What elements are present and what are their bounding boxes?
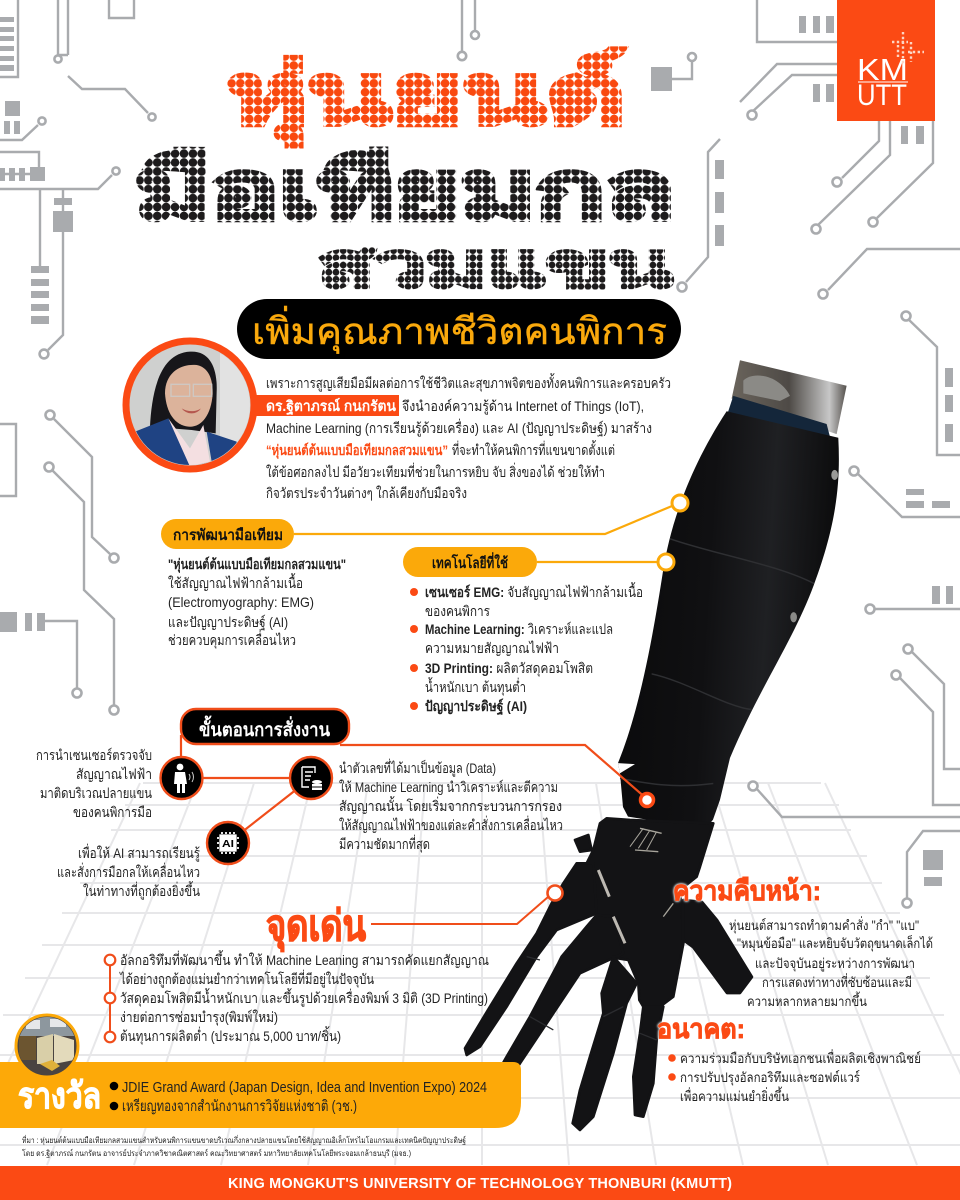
heading pill: operating steps: ขั้นตอนการสั่งงาน [199,715,330,741]
text: step data [339,759,563,853]
award heading: รางวัล [18,1075,101,1116]
list: highlights: ได้อย่างถูกต้องแม่นยำกว่าเทคโนโลยีที่มีอยู่ในปัจจุบัน [119,970,374,988]
title line 3: สวมแขน: สวมแขน [318,232,672,299]
intro paragraph: จึงนำองค์ความรู้ด้าน Internet of Things (IoT), [402,398,644,415]
circuit lines left top [0,0,156,358]
logo: KMUTT: KM [857,52,908,87]
author name highlight: ดร.ฐิตาภรณ์ กนกรัตน [266,397,396,416]
text: step AI: เพื่อให้ AI สามารถเรียนรู้ [78,844,200,862]
text: progress: ความหลากหลายมากขึ้น [747,991,867,1009]
subtitle pill: เพิ่มคุณภาพชีวิตคนพิการ [252,305,667,354]
callout: technology used: เทคโนโลยีที่ใช้ [432,552,508,572]
source note: โดย ดร.ฐิตาภรณ์ กนกรัตน อาจารย์ประจำภาควิชาคณิตศาสตร์ คณะวิทยาศาสตร์ มหาวิทยาลัยเทคโนโลยีพระจอมเกล้าธนบุรี (มจธ.) [22,1148,411,1158]
list: future: ความร่วมมือกับบริษัทเอกชนเพื่อผลิตเชิงพาณิชย์ [680,1049,921,1066]
list: highlights: วัสดุคอมโพสิตมีน้ำหนักเบา และขึ้นรูปด้วยเครื่องพิมพ์ 3 มิติ (3D Printing) [120,988,488,1007]
callout: prosthetic development [161,495,688,549]
title line 1: หุ่นยนต์: หุ่นยนต์ [227,48,625,146]
text: step sensor: การนำเซนเซอร์ตรวจจับ [36,747,152,763]
circuit lines top right [458,0,960,455]
intro paragraph: ใต้ข้อศอกลงไป มีอวัยวะเทียมที่ช่วยในการหยิบ จับ สิ่งของได้ ช่วยให้ทำ [266,463,605,480]
list: technology used [410,582,643,716]
text: step data: มีความชัดมากที่สุด [339,835,430,853]
list: highlights: ง่ายต่อการซ่อมบำรุง(พิมพ์ใหม่) [120,1009,278,1026]
award photo [16,1015,78,1077]
list: technology used: ปัญญาประดิษฐ์ (AI) [425,698,527,716]
subtitle pill [237,299,681,359]
text: step data: ให้สัญญาณไฟฟ้าของแต่ละคำสั่งการเคลื่อนไหว [339,816,563,833]
list: highlights [105,950,489,1045]
intro paragraph: “หุ่นยนต์ต้นแบบมือเทียมกลสวมแขน” [266,442,448,459]
list: technology used: น้ำหนักเบา ต้นทุนต่ำ [425,677,526,696]
text: progress [729,916,933,1009]
text: step sensor: ของคนพิการมือ [73,804,152,820]
footer bar: KING MONGKUT'S UNIVERSITY OF TECHNOLOGY THONBURI (KMUTT) [228,1176,732,1192]
text: prosthetic development: (Electromyography: EMG) [168,594,314,610]
list: future [668,1049,921,1104]
text: progress: การแสดงท่าทางที่ซับซ้อนและมี [762,973,912,990]
logo: KMUTT [837,0,935,121]
text: step AI: และสั่งการมือกลให้เคลื่อนไหว [57,863,200,880]
heading: future: อนาคต: [657,1014,745,1044]
title line 2: มือเทียมกล: มือเทียมกล [135,146,675,235]
heading pill: operating steps [181,709,349,744]
award band: JDIE Grand Award (Japan Design, Idea and Invention Expo) 2024 [122,1079,487,1096]
text: step sensor [36,747,152,820]
list: technology used: ของคนพิการ [425,603,490,619]
list: technology used: 3D Printing: ผลิตวัสดุคอมโพสิต [425,660,593,677]
award band: เหรียญทองจากสำนักงานการวิจัยแห่งชาติ (วช.) [122,1098,357,1115]
robotic arm photo [465,360,847,1130]
text: step data: สัญญาณนั้น โดยเริ่มจากกระบวนการกรอง [339,796,562,814]
text: step sensor: มาติดบริเวณปลายแขน [40,785,152,801]
circuit lines left middle [0,410,118,714]
heading: highlights [266,886,562,952]
text: progress: หุ่นยนต์สามารถทำตามคำสั่ง "กำ" "แบ" [729,916,919,934]
list: future: เพื่อความแม่นยำยิ่งขึ้น [680,1086,789,1104]
text: step sensor: สัญญาณไฟฟ้า [76,766,152,782]
text: prosthetic development: ช่วยควบคุมการเคลื่อนไหว [168,631,296,649]
text: step AI: ในท่าทางที่ถูกต้องยิ่งขึ้น [83,881,200,900]
list: future: การปรับปรุงอัลกอริทึมและซอฟต์แวร์ [680,1069,860,1086]
text: prosthetic development: ใช้สัญญาณไฟฟ้ากล้ามเนื้อ [168,573,303,591]
icon: AI chip [207,822,249,864]
list: highlights: อัลกอริทึมที่พัฒนาขึ้น ทำให้ Machine Leaning สามารถคัดแยกสัญญาณ [120,950,489,968]
text: step data: นำตัวเลขที่ได้มาเป็นข้อมูล (Data) [339,759,496,777]
text: step data: ให้ Machine Learning นำวิเคราะห์และตีความ [339,779,558,795]
callout: prosthetic development: การพัฒนามือเทียม [173,527,283,544]
text: progress: และปัจจุบันอยู่ระหว่างการพัฒนา [755,956,915,972]
icon: person with sensor [160,757,202,799]
intro paragraph: ที่จะทำให้คนพิการที่แขนขาดตั้งแต่ [452,440,615,458]
list: technology used: เซนเซอร์ EMG: จับสัญญาณไฟฟ้ากล้ามเนื้อ [425,582,643,600]
icon: data document [290,757,332,799]
logo: KMUTT: UTT [857,79,907,112]
hand [465,818,752,1130]
text: prosthetic development [168,556,346,649]
intro paragraph: เพราะการสูญเสียมือมีผลต่อการใช้ชีวิตและสุขภาพจิตของทั้งคนพิการและครอบครัว [266,373,671,392]
forearm socket [618,360,847,827]
source note [22,1134,466,1158]
callout: technology used [403,547,674,577]
list: technology used: ความหมายสัญญาณไฟฟ้า [425,640,559,656]
icon: AI chip: AI [222,839,234,850]
perspective grid background [0,783,960,1165]
text: prosthetic development: และปัญญาประดิษฐ์ (AI) [168,614,288,631]
footer bar [0,1166,960,1200]
intro paragraph: Machine Learning (การเรียนรู้ด้วยเครื่อง) และ AI (ปัญญาประดิษฐ์) มาสร้าง [266,419,652,437]
arm marker: wrist [640,794,654,806]
author name highlight [255,395,399,416]
text: prosthetic development: "หุ่นยนต์ต้นแบบมือเทียมกลสวมแขน" [168,556,346,573]
heading: progress: ความคืบหน้า: [673,876,821,906]
intro paragraph [255,373,671,501]
portrait photo [126,341,254,477]
intro paragraph: กิจวัตรประจำวันต่างๆ ใกล้เคียงกับมือจริง [266,485,467,501]
award band [0,1062,521,1128]
text: step AI [57,844,200,900]
source note: ที่มา : หุ่นยนต์ต้นแบบมือเทียมกลสวมแขนสำหรับคนพิการแขนขาดบริเวณกึ่งกลางปลายแขนโดยใช้สัญญาณอิเล็กโทรไมโอแกรมและเทคนิคปัญญาประดิษฐ์ [22,1134,466,1145]
circuit lines right middle [748,466,960,908]
operating steps connector lines [181,735,647,843]
list: technology used: Machine Learning: วิเคราะห์และแปล [425,621,613,637]
list: highlights: ต้นทุนการผลิตต่ำ (ประมาณ 5,000 บาท/ชิ้น) [120,1026,341,1045]
heading: highlights: จุดเด่น [266,902,366,952]
